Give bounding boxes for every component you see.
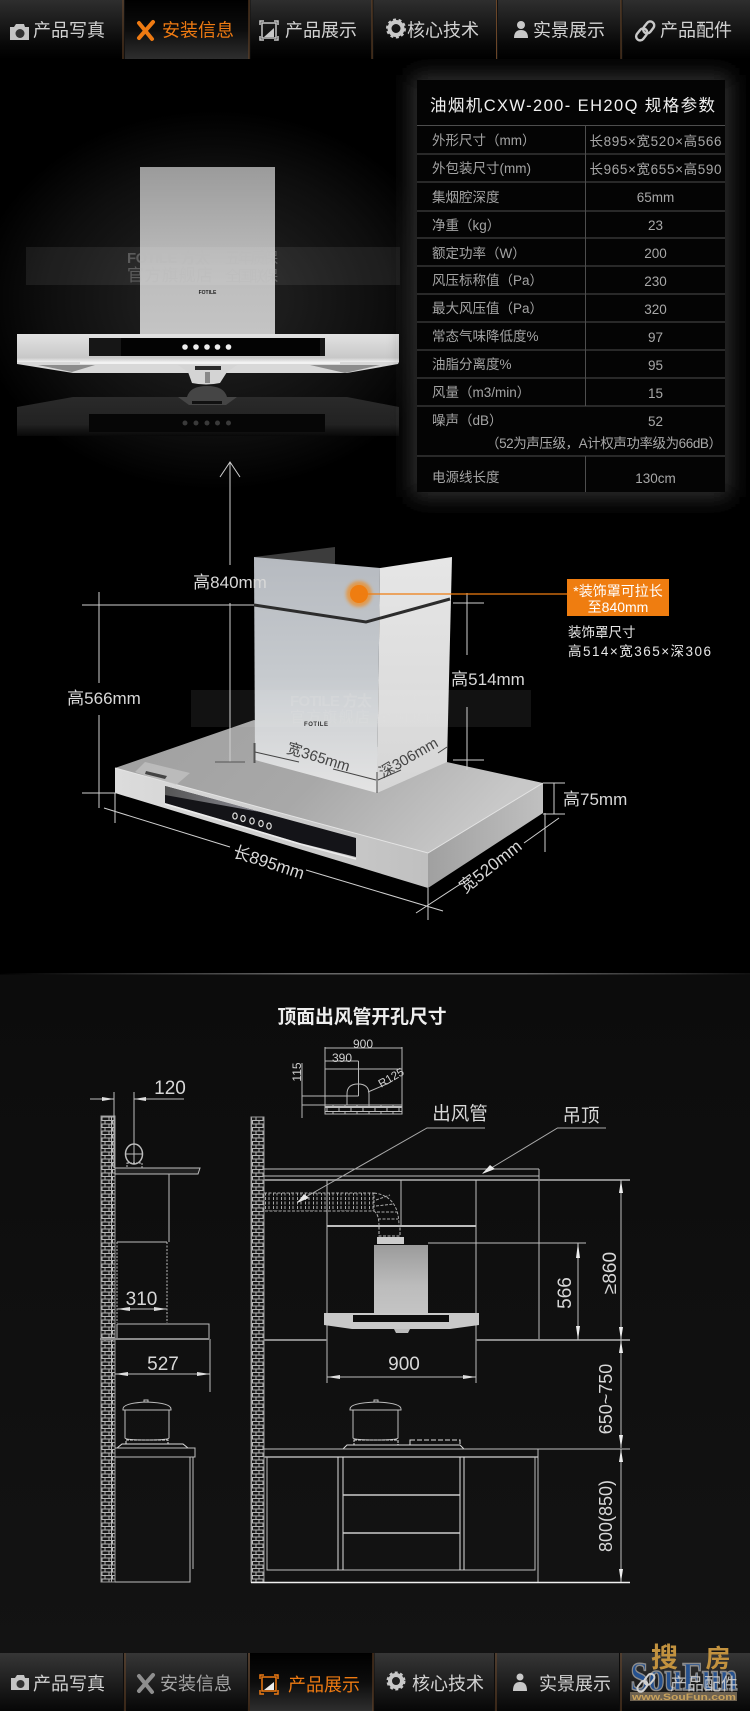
icon: chain link bottom bbox=[636, 1672, 656, 1693]
dim 566 bbox=[577, 1243, 579, 1340]
icon: person bbox=[513, 1674, 527, 1691]
table row labels: 集烟腔深度 bbox=[432, 190, 500, 205]
noise footnote: （52为声压级，A计权声功率级为66dB） bbox=[486, 435, 722, 451]
table row values: 23 bbox=[648, 218, 663, 233]
bottom navigation bar bbox=[0, 1653, 750, 1711]
nav item: real scene: 实景展示 bbox=[539, 1674, 611, 1694]
dim lines: length 895 bbox=[104, 793, 443, 920]
table row labels: 风压标称值（Pa） bbox=[432, 273, 543, 288]
table row values: 97 bbox=[648, 330, 663, 345]
callout: extendable cover: *装饰罩可拉长 bbox=[573, 583, 663, 599]
nav item: product display active: 产品展示 bbox=[288, 1675, 360, 1695]
icon: camera bbox=[10, 24, 29, 40]
lower section background bbox=[0, 973, 750, 1653]
top navigation bar bbox=[0, 0, 750, 59]
callout: outlet duct: 出风管 bbox=[432, 1103, 488, 1124]
orange hot spot bbox=[346, 581, 372, 607]
labels: side elevation bbox=[126, 1078, 186, 1375]
dim lines: height 514 bbox=[453, 593, 484, 770]
callout: extendable cover: 装饰罩尺寸 bbox=[568, 625, 636, 640]
dim lines: width 520 bbox=[416, 813, 559, 913]
table row labels: 风量（m3/min） bbox=[432, 385, 530, 400]
labels: front elevation: 566 bbox=[555, 1277, 576, 1309]
small hood body bbox=[324, 1313, 479, 1329]
wall cabinet bbox=[115, 1168, 200, 1174]
pot bbox=[350, 1402, 401, 1440]
table row values: 95 bbox=[648, 358, 663, 373]
callout: extendable cover: 高514×宽365×深306 bbox=[568, 643, 711, 659]
duct circle bbox=[126, 1144, 142, 1164]
watermark band on drawing: FOTILE 方太 bbox=[290, 692, 372, 710]
hood body bbox=[17, 334, 399, 362]
nav item: product display: 产品展示 bbox=[285, 20, 357, 40]
table row values: 230 bbox=[644, 274, 667, 289]
panel: spec table bbox=[417, 80, 725, 492]
dimension labels on hood: 长895mm bbox=[231, 842, 307, 883]
nav item: core technology: 核心技术 bbox=[407, 20, 479, 40]
labels: front elevation: 900 bbox=[388, 1354, 420, 1375]
3D hood drawing bbox=[115, 547, 543, 888]
labels: top opening sizes: 390 bbox=[332, 1051, 352, 1065]
dimension labels on hood bbox=[67, 573, 627, 897]
table row values: 15 bbox=[648, 386, 663, 401]
dimension labels on hood: 高514mm bbox=[451, 670, 525, 689]
labels: front elevation bbox=[388, 1252, 621, 1552]
soufun watermark: www.SouFun.com bbox=[631, 1692, 736, 1703]
glow behind product photo bbox=[0, 110, 455, 490]
brick wall bbox=[251, 1117, 264, 1582]
dimension labels on hood: 宽365mm bbox=[285, 740, 352, 775]
nav item: product photos: 产品写真 bbox=[33, 20, 105, 40]
rear chimney flange bbox=[254, 547, 335, 567]
dimension labels on hood: 高840mm bbox=[193, 573, 267, 592]
center fan unit bbox=[178, 365, 237, 384]
diagram: top opening bbox=[290, 1037, 406, 1118]
hood right face bbox=[428, 783, 543, 888]
dim lines: chimney depth 306 bbox=[377, 747, 447, 793]
control buttons bbox=[182, 344, 231, 350]
nav item: accessories bottom: 产品配件 bbox=[670, 1675, 738, 1694]
watermark band on photo: 全国联保 bbox=[225, 267, 278, 285]
callout: suspended ceiling: 吊顶 bbox=[562, 1105, 600, 1126]
icon: chain link bbox=[635, 20, 656, 42]
icon: tools grey bbox=[139, 1675, 153, 1692]
stove bbox=[343, 1445, 464, 1449]
table row labels: 外包装尺寸(mm) bbox=[432, 161, 531, 176]
dim 527 bbox=[115, 1373, 210, 1375]
dim lines: chimney width 365 bbox=[255, 752, 376, 780]
callout: extendable cover bbox=[359, 579, 711, 659]
soufun watermark: 房 bbox=[705, 1645, 731, 1673]
counter bbox=[264, 1448, 630, 1450]
hood level lines bbox=[428, 1242, 586, 1244]
table row values: 200 bbox=[644, 246, 667, 261]
hood chimney bbox=[140, 167, 275, 334]
callout: suspended ceiling bbox=[482, 1105, 606, 1174]
watermark band on drawing: 官方旗舰店 全国联保 bbox=[290, 708, 440, 726]
table row labels: 噪声（dB） bbox=[432, 413, 503, 428]
table row labels bbox=[432, 133, 543, 485]
icon: camera bbox=[11, 1675, 29, 1690]
diagram: side elevation bbox=[90, 1092, 210, 1582]
dimension labels on hood: 高75mm bbox=[563, 790, 627, 809]
watermark band on photo: 官方旗舰店 bbox=[127, 266, 213, 285]
duct bbox=[264, 1193, 374, 1211]
labels: front elevation: ≥860 bbox=[600, 1252, 621, 1294]
dim 900 bbox=[327, 1376, 476, 1378]
table row labels: 净重（kg） bbox=[432, 218, 500, 233]
table row values bbox=[590, 133, 722, 486]
pot bbox=[123, 1402, 171, 1440]
energy label bbox=[135, 762, 190, 785]
hood top surface bbox=[115, 720, 543, 853]
dimension annotations on hood bbox=[82, 462, 565, 920]
chimney dark band bbox=[254, 599, 450, 622]
watermark band on photo: FOTILE 方太 bbox=[127, 249, 210, 267]
nav item: install info active: 安装信息 bbox=[162, 20, 234, 40]
callout: extendable cover: 至840mm bbox=[588, 599, 648, 615]
black control panel bbox=[89, 338, 325, 356]
dimension labels on hood: 高566mm bbox=[67, 689, 141, 708]
labels: top opening sizes: 900 bbox=[353, 1037, 373, 1051]
dim 120 bbox=[90, 1092, 184, 1168]
table row labels: 油脂分离度% bbox=[432, 356, 512, 372]
watermark band on photo bbox=[26, 247, 400, 285]
black panel bbox=[165, 786, 356, 857]
table row labels: 电源线长度 bbox=[432, 470, 500, 485]
arrow: height 840 bbox=[215, 462, 245, 762]
table row values: 65mm bbox=[637, 190, 674, 205]
heading: top duct opening size: 顶面出风管开孔尺寸 bbox=[278, 1005, 446, 1027]
labels: top opening sizes bbox=[290, 1037, 406, 1090]
table row labels: 外形尺寸（mm） bbox=[432, 133, 536, 148]
dimension labels on hood: 宽520mm bbox=[456, 836, 525, 897]
dim 800 bbox=[620, 1449, 622, 1582]
labels: top opening sizes: 115 bbox=[290, 1062, 304, 1082]
soufun watermark: 搜 bbox=[651, 1643, 678, 1673]
icon: gear bbox=[387, 20, 405, 38]
table title: 油烟机CXW-200- EH20Q 规格参数 bbox=[430, 96, 716, 115]
chimney logo: FOTILE bbox=[304, 722, 328, 728]
table row labels: 最大风压值（Pa） bbox=[432, 301, 543, 316]
table row labels: 额定功率（W） bbox=[432, 245, 526, 261]
counter and cabinet bbox=[115, 1448, 195, 1582]
soufun watermark bbox=[630, 1643, 738, 1703]
dim lines: height 75 bbox=[543, 783, 565, 814]
dim 860 bbox=[620, 1180, 622, 1340]
labels: side elevation: 310 bbox=[126, 1289, 157, 1310]
labels: front elevation: 650~750 bbox=[596, 1364, 616, 1434]
hood side bbox=[117, 1324, 209, 1339]
nav item: accessories: 产品配件 bbox=[660, 20, 732, 40]
hood front face bbox=[115, 768, 428, 888]
nav item: product photos: 产品写真 bbox=[33, 1674, 105, 1694]
labels: side elevation: 527 bbox=[147, 1354, 179, 1375]
dim 650-750 bbox=[620, 1340, 622, 1448]
base cabinet bbox=[267, 1457, 535, 1570]
icon: person bbox=[514, 21, 528, 38]
dim lines: height 566 bbox=[82, 592, 254, 808]
panel buttons bbox=[233, 813, 271, 829]
watermark band on photo: 五年质保 bbox=[225, 250, 278, 267]
icon: gear bbox=[388, 1672, 404, 1690]
icon: picture frame bbox=[260, 21, 278, 40]
ceiling bbox=[264, 1169, 539, 1340]
small hood chimney bbox=[374, 1245, 428, 1313]
stove bbox=[117, 1444, 188, 1448]
table row values: 320 bbox=[644, 302, 667, 317]
diagram: front elevation bbox=[251, 1117, 630, 1582]
labels: top opening sizes: R125 bbox=[377, 1066, 406, 1090]
table row labels: 常态气味降低度% bbox=[432, 329, 539, 344]
icon: frame orange bbox=[260, 1675, 278, 1694]
callout: outlet duct bbox=[297, 1103, 488, 1203]
wall cabinets bbox=[327, 1180, 476, 1383]
icon: tools orange bbox=[139, 22, 153, 39]
dim 310 bbox=[117, 1308, 167, 1310]
nav item: core technology: 核心技术 bbox=[412, 1674, 484, 1694]
dimension labels on hood: 深306mm bbox=[376, 734, 441, 782]
nav item: real scene: 实景展示 bbox=[533, 20, 605, 40]
spec table glow bbox=[412, 75, 730, 497]
floor bbox=[251, 1582, 630, 1584]
brick wall bbox=[101, 1116, 115, 1582]
reflection bbox=[17, 397, 399, 436]
table row values: 130cm bbox=[635, 471, 676, 486]
chimney base shade bbox=[254, 743, 256, 763]
nav item: install info: 安装信息 bbox=[160, 1674, 232, 1694]
table row values: 52 bbox=[648, 414, 663, 429]
table row values: 长895×宽520×高566 bbox=[590, 133, 722, 149]
hood logo: FOTILE bbox=[199, 290, 217, 296]
chimney left face bbox=[254, 557, 380, 793]
product front photo bbox=[17, 167, 399, 436]
table row values: 长965×宽655×高590 bbox=[590, 161, 722, 177]
labels: front elevation: 800(850) bbox=[596, 1480, 616, 1552]
chimney right face bbox=[377, 557, 452, 793]
watermark band on drawing bbox=[191, 690, 531, 727]
watermark band on drawing: 五年质保 bbox=[378, 693, 444, 710]
labels: side elevation: 120 bbox=[154, 1078, 186, 1099]
